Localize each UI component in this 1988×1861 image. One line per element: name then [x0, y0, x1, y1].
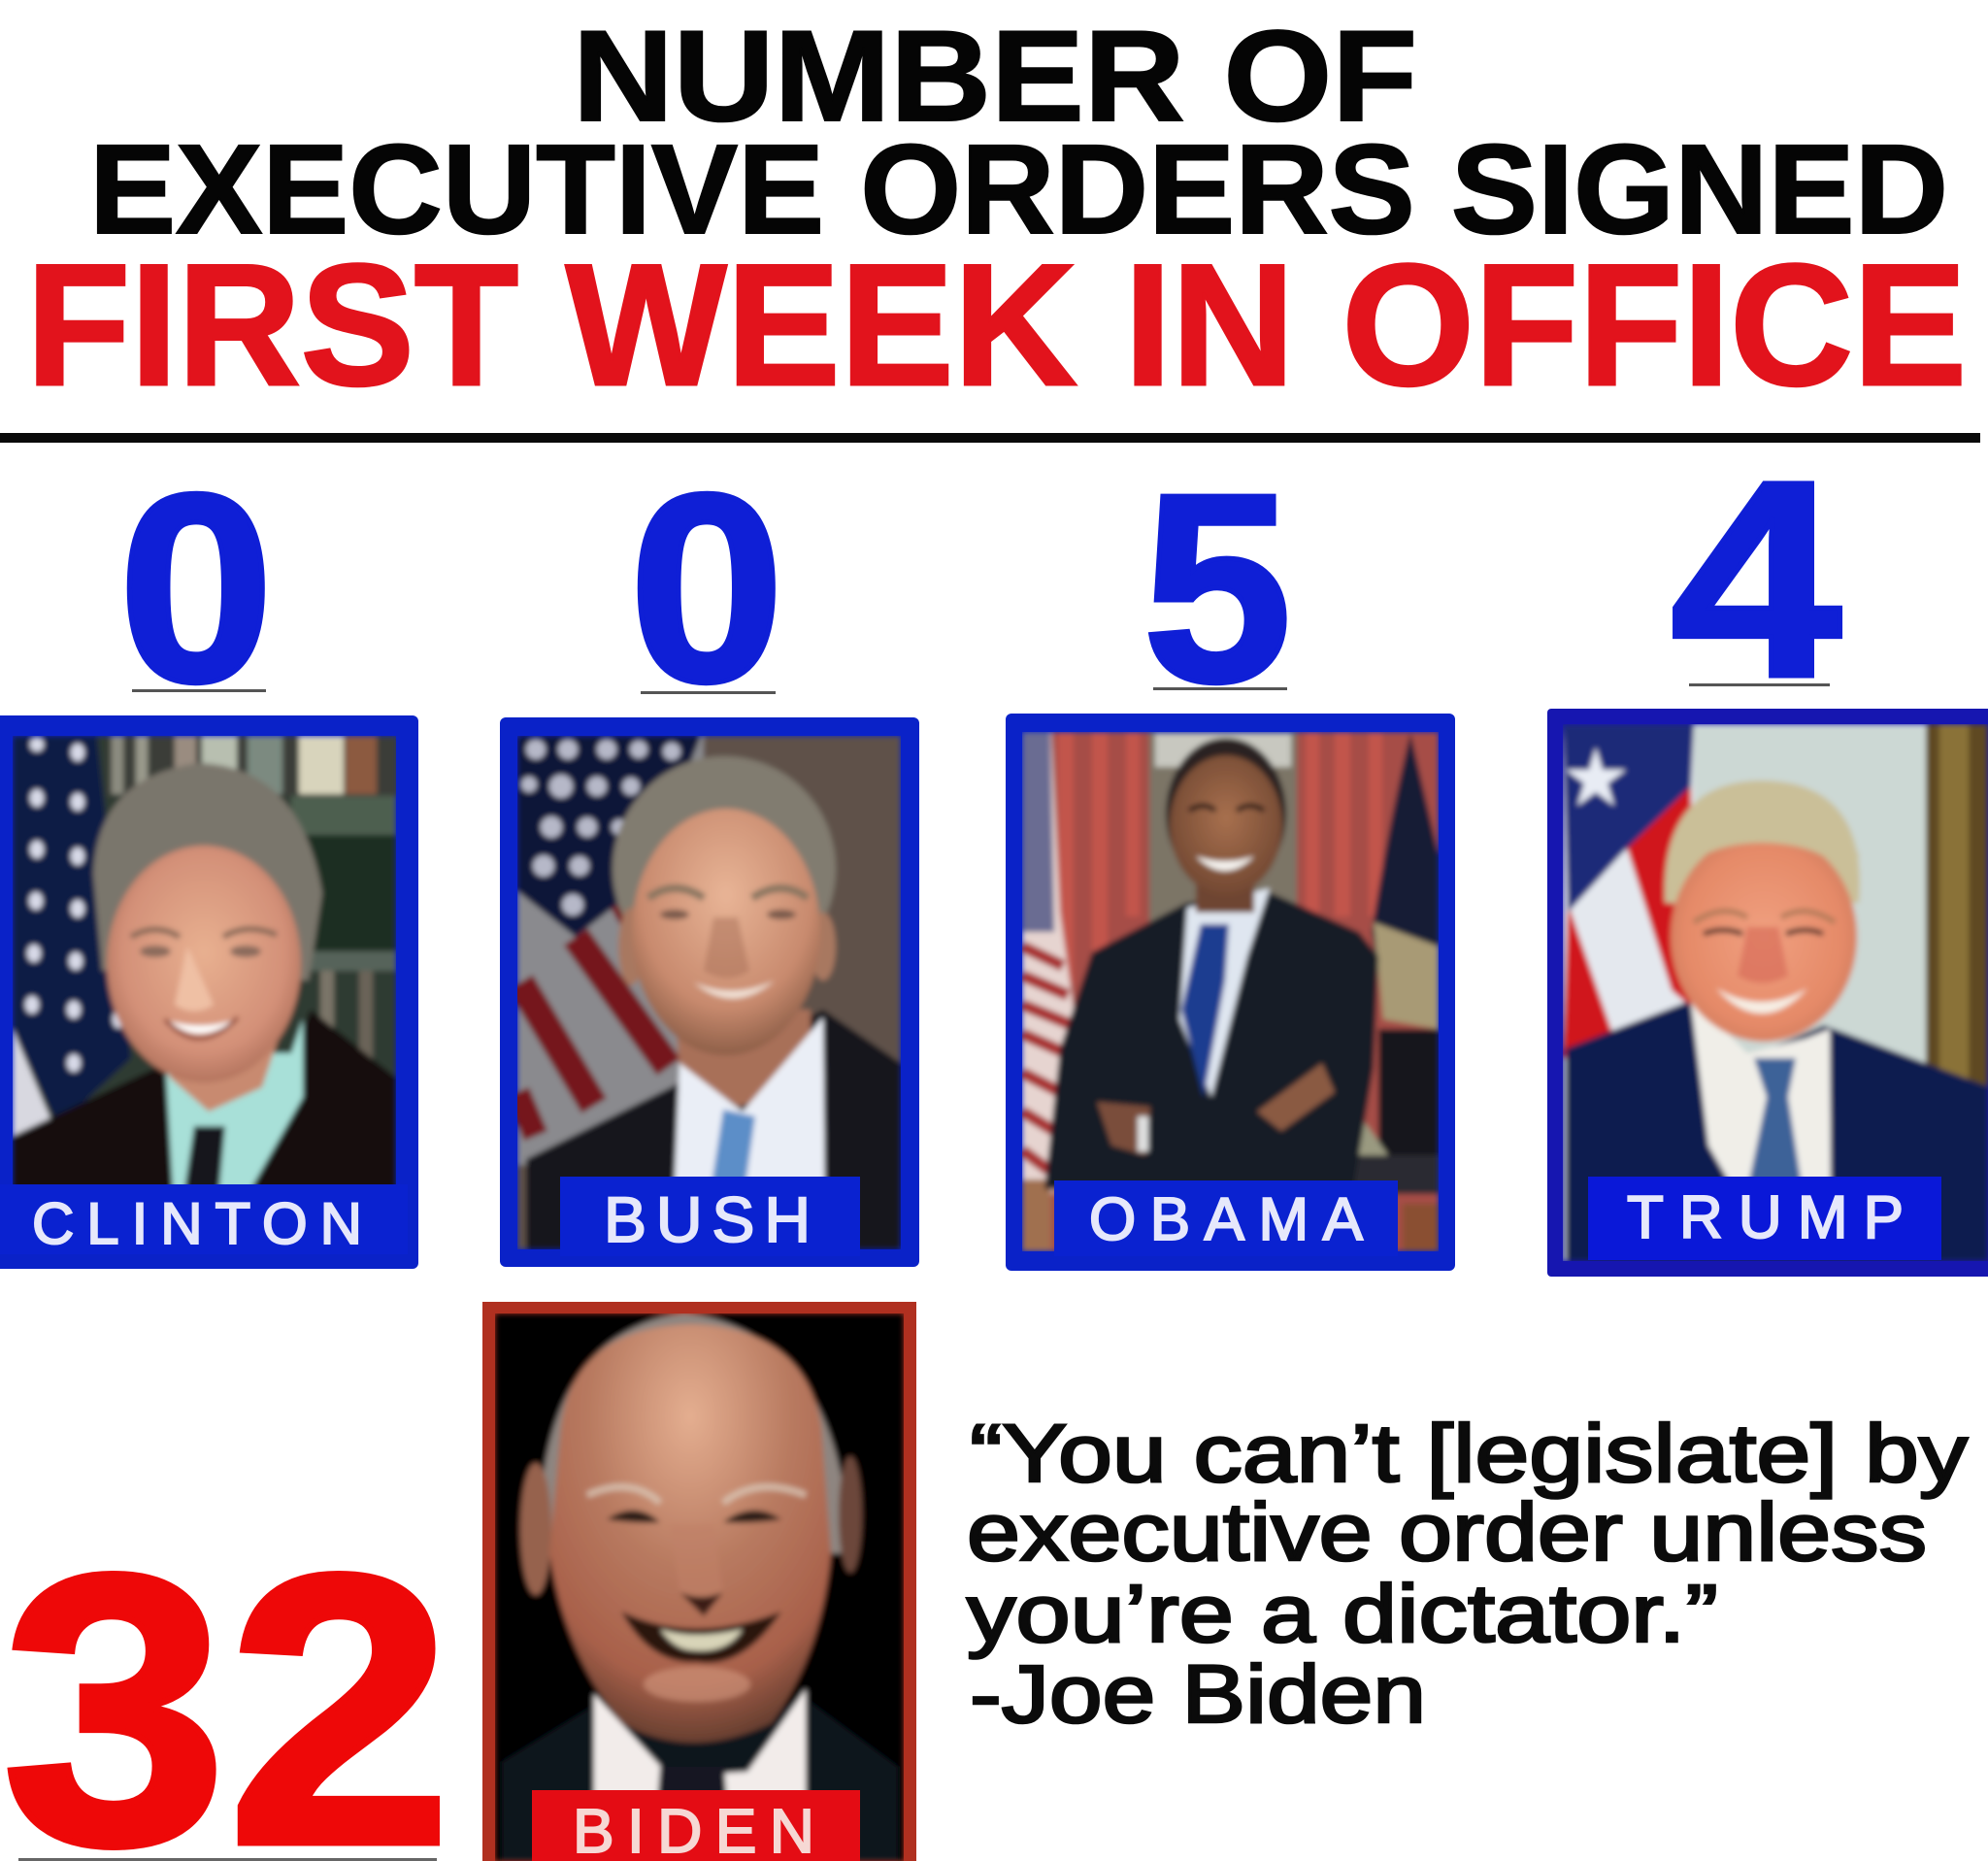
title line 1: NUMBER OF: [573, 5, 1417, 149]
count: Trump 4: 4: [1671, 423, 1843, 736]
name label: Obama: OBAMA: [1089, 1186, 1364, 1253]
panel: Obama: [1006, 714, 1455, 1271]
photo: Clinton: [13, 736, 398, 1192]
title: [26, 5, 1967, 421]
photo: Obama: [1022, 732, 1439, 1251]
panel: Clinton: [0, 715, 418, 1269]
count: Bush 0: 0: [629, 439, 784, 738]
name label: Biden: [532, 1790, 860, 1861]
count: Clinton 0: 0: [118, 439, 274, 738]
quote block: -Joe Biden: [970, 1648, 1426, 1740]
title line 3 in red: FIRST WEEK IN OFFICE: [26, 228, 1967, 421]
name label: Trump: [1588, 1177, 1941, 1260]
photo: Bush: [517, 736, 901, 1249]
name label: Bush: [560, 1177, 860, 1256]
panel: Biden: [482, 1302, 916, 1861]
photo: Biden: [495, 1313, 904, 1861]
name label: Trump: TRUMP: [1627, 1184, 1904, 1251]
panel: Trump: [1547, 709, 1988, 1277]
panel: Bush: [500, 717, 919, 1267]
title line 2: EXECUTIVE ORDERS SIGNED: [89, 117, 1948, 260]
photo: Trump: [1563, 724, 1988, 1261]
count: Obama 5: 5: [1143, 439, 1292, 738]
quote block: executive order unless: [967, 1486, 1927, 1578]
name label: Clinton: CLINTON: [32, 1191, 362, 1256]
quote block: you’re a dictator.”: [967, 1568, 1718, 1659]
name label: Bush: BUSH: [604, 1183, 811, 1255]
quote block: [967, 1408, 1968, 1740]
quote block: “You can’t [legislate] by: [970, 1408, 1968, 1499]
